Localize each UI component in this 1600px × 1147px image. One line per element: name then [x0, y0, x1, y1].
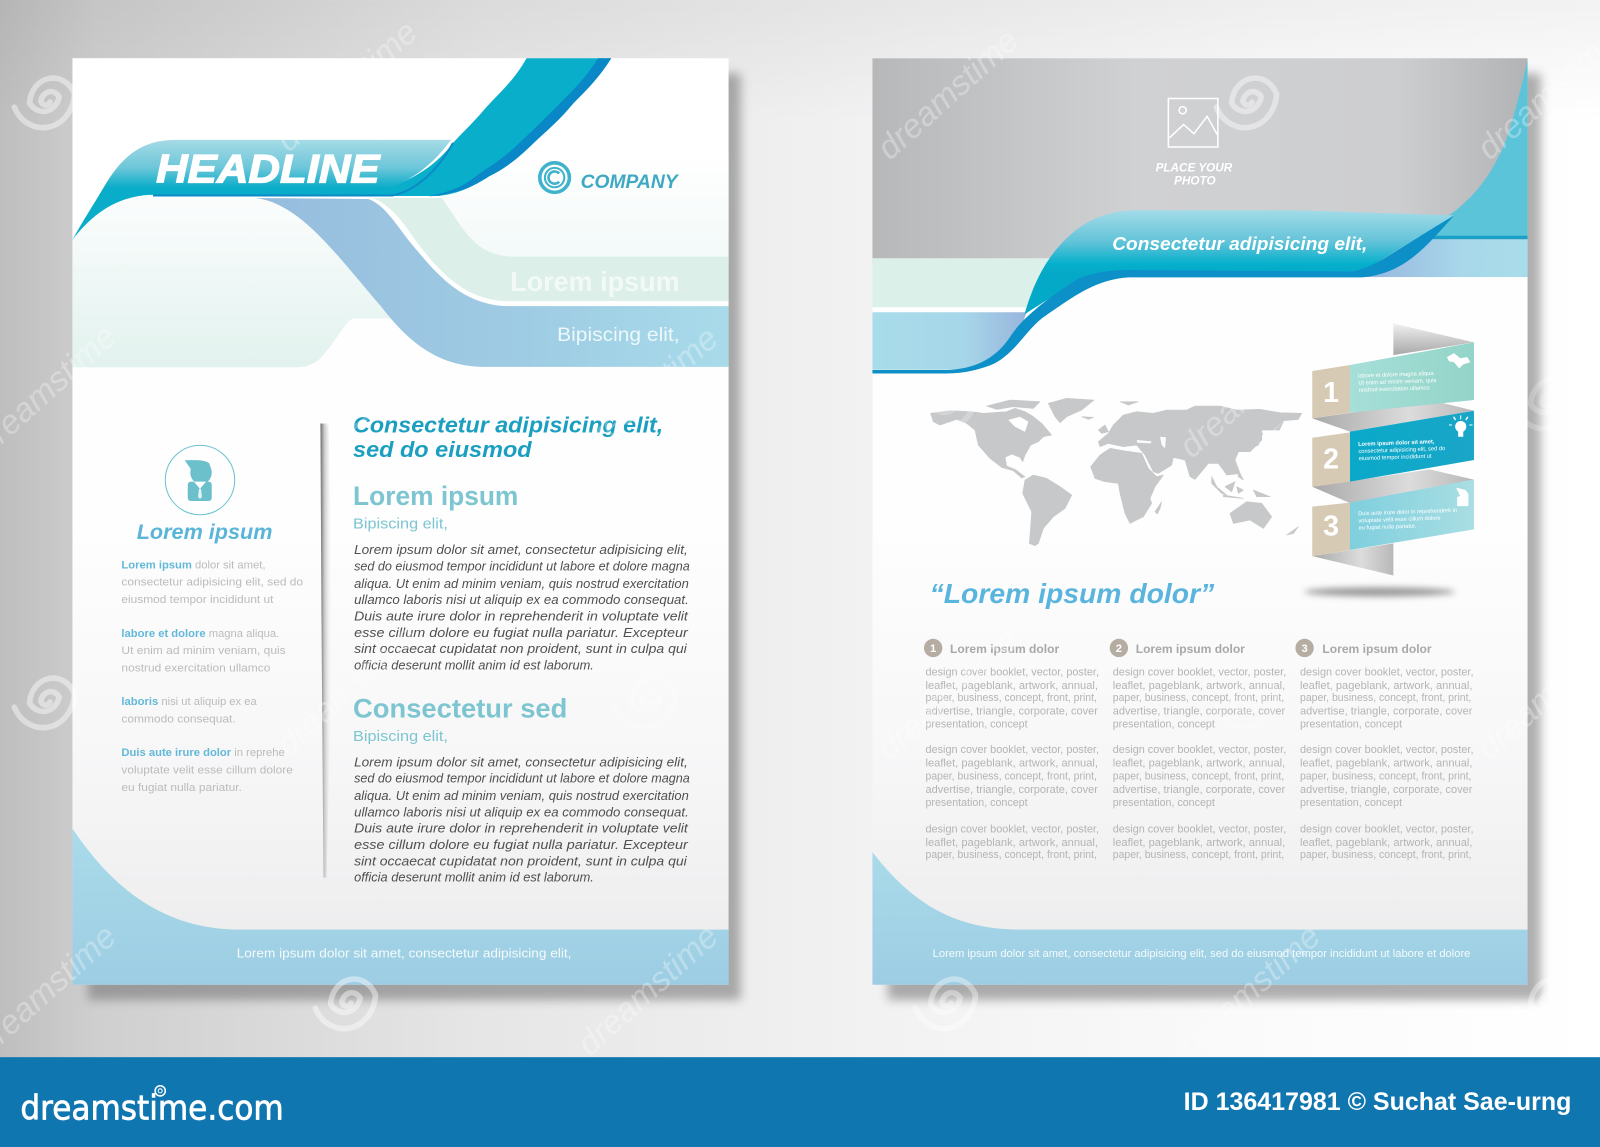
step 2: eiusmod tempor incididunt ut: [1359, 454, 1432, 462]
column 1: paper, business, concept, front, print,: [926, 692, 1097, 704]
sidebar text: [121, 559, 303, 794]
column 3: presentation, concept: [1300, 719, 1403, 731]
column 1: advertise, triangle, corporate, cover: [926, 705, 1098, 717]
step 1: labore et dolore magna aliqua.: [1358, 371, 1436, 380]
blue wave band: [256, 198, 729, 367]
step 2: [1312, 411, 1474, 487]
image id and credit: ID 136417981 © Suchat Sae-urng: [1184, 1088, 1571, 1116]
column 2: [1110, 639, 1286, 861]
dreamstime logo: dreamstime.com: [20, 1088, 284, 1127]
sidebar text: eu fugiat nulla pariatur.: [121, 782, 242, 794]
paragraph 1: [354, 542, 690, 672]
icon: person: [1456, 488, 1468, 506]
column 3: [1295, 639, 1473, 861]
watermark text: dreamstime: [1172, 320, 1328, 465]
shadow ellipse: [1304, 587, 1455, 596]
step 3: [1312, 479, 1474, 556]
paragraph 2: esse cillum dolore eu fugiat nulla pariatur. Excepteur: [354, 837, 689, 852]
ribbon infographic: [1304, 324, 1474, 596]
column 2: design cover booklet, vector, poster,: [1113, 824, 1286, 836]
watermark text: dreamstime: [870, 22, 1026, 167]
sidebar text: Duis aute irure dolor in reprehe: [121, 747, 285, 759]
step 2: consectetur adipisicing elit, sed do: [1358, 446, 1445, 455]
paragraph 1: Duis aute irure dolor in reprehenderit in voluptate velit: [354, 608, 688, 623]
sidebar text: voluptate velit esse cillum dolore: [121, 764, 293, 776]
panel: right brochure page: [872, 58, 1528, 985]
step 3: eu fugiat nulla pariatur.: [1359, 524, 1417, 532]
photo caption: PHOTO: [1174, 175, 1216, 188]
column 1: Lorem ipsum dolor: [950, 643, 1060, 656]
watermark text: dreamstime: [269, 618, 425, 763]
sidebar text: nostrud exercitation ullamco: [121, 662, 270, 674]
paragraph 1: sint occaecat cupidatat non proident, sunt in culpa qui: [354, 641, 688, 656]
subheading 1: Bipiscing elit,: [353, 517, 448, 533]
column 3: 3: [1301, 643, 1308, 655]
step 1: Ut enim ad minim veniam, quis: [1358, 378, 1437, 387]
step 1 fold: [1312, 401, 1474, 432]
icon: company logo: [540, 163, 569, 192]
step 2: 2: [1323, 443, 1339, 475]
right footer text: Lorem ipsum dolor sit amet, consectetur adipisicing elit, sed do eiusmod tempor incididunt ut labore et dolore: [933, 948, 1470, 960]
right footer band: [872, 852, 1528, 985]
column 3: paper, business, concept, front, print,: [1300, 771, 1471, 783]
left light blue band: [872, 312, 1027, 369]
column 2: paper, business, concept, front, print,: [1113, 849, 1284, 861]
subheading 2: Bipiscing elit,: [353, 729, 448, 745]
main heading: Consectetur adipisicing elit,: [353, 413, 663, 438]
column 3: advertise, triangle, corporate, cover: [1300, 705, 1473, 717]
icon: light bulb: [1449, 415, 1472, 437]
paragraph 2: officia deserunt mollit anim id est laborum.: [354, 870, 594, 885]
main heading: sed do eiusmod: [353, 437, 533, 462]
paragraph 2: sed do eiusmod tempor incididunt ut labore et dolore magna: [354, 771, 690, 786]
column 3: leaflet, pageblank, artwork, annual,: [1300, 680, 1472, 692]
step 3: 3: [1323, 511, 1339, 543]
column 1: design cover booklet, vector, poster,: [926, 667, 1099, 679]
column 3: paper, business, concept, front, print,: [1300, 692, 1471, 704]
icon: person in circle: [165, 445, 235, 515]
headline ribbon: [72, 58, 611, 240]
wave ribbon: [872, 210, 1454, 374]
column 3: advertise, triangle, corporate, cover: [1300, 784, 1473, 796]
photo placeholder area: [872, 58, 1528, 263]
top gray fold: [1393, 324, 1474, 355]
faint wash top right: [439, 153, 729, 265]
photo caption: PLACE YOUR: [1156, 161, 1233, 174]
panel: left brochure page: [72, 58, 729, 985]
sidebar heading: Lorem ipsum: [137, 520, 272, 544]
paragraph 1: sed do eiusmod tempor incididunt ut labore et dolore magna: [354, 558, 690, 573]
column 1: design cover booklet, vector, poster,: [926, 744, 1099, 756]
world map: [931, 398, 1302, 546]
section heading: Lorem ipsum: Lorem ipsum: [353, 481, 518, 511]
paragraph 2: [354, 754, 690, 885]
column 2: presentation, concept: [1113, 719, 1216, 731]
sidebar text: Ut enim ad minim veniam, quis: [121, 645, 286, 657]
paragraph 2: Lorem ipsum dolor sit amet, consectetur adipisicing elit,: [354, 754, 688, 769]
paragraph 1: officia deserunt mollit anim id est laborum.: [354, 657, 594, 672]
column 1: 1: [930, 643, 936, 655]
teal corner: [1418, 60, 1528, 237]
column 1: leaflet, pageblank, artwork, annual,: [926, 837, 1098, 849]
column 2: advertise, triangle, corporate, cover: [1113, 705, 1285, 717]
left footer text: Lorem ipsum dolor sit amet, consectetur adipisicing elit,: [237, 946, 571, 961]
step 1: nostrud exercitation ullamco: [1359, 385, 1430, 394]
column 3: leaflet, pageblank, artwork, annual,: [1300, 757, 1472, 769]
column 2: design cover booklet, vector, poster,: [1113, 667, 1286, 679]
column 3: presentation, concept: [1300, 797, 1403, 809]
column 2: 2: [1116, 643, 1122, 655]
column 3: design cover booklet, vector, poster,: [1300, 824, 1473, 836]
mint wave band: [373, 198, 729, 301]
paragraph 2: sint occaecat cupidatat non proident, sunt in culpa qui: [354, 853, 688, 868]
column 2: presentation, concept: [1113, 797, 1216, 809]
left footer band: [72, 829, 729, 985]
mint panel left: [72, 196, 393, 367]
column 3: paper, business, concept, front, print,: [1300, 849, 1471, 861]
paragraph 1: esse cillum dolore eu fugiat nulla pariatur. Excepteur: [354, 625, 689, 640]
paragraph 2: aliqua. Ut enim ad minim veniam, quis nostrud exercitation: [354, 788, 689, 803]
column 2: paper, business, concept, front, print,: [1113, 771, 1284, 783]
column 1: [924, 639, 1099, 861]
paragraph 1: ullamco laboris nisi ut aliquip ex ea commodo consequat.: [354, 592, 689, 607]
column fold line: [320, 424, 333, 878]
right page shadow: [888, 74, 1541, 1000]
column 2: design cover booklet, vector, poster,: [1113, 744, 1286, 756]
step 1: [1312, 342, 1474, 418]
column 3: leaflet, pageblank, artwork, annual,: [1300, 837, 1472, 849]
company name: COMPANY: [581, 171, 680, 193]
sidebar text: consectetur adipisicing elit, sed do: [121, 577, 303, 589]
column 2: Lorem ipsum dolor: [1136, 643, 1245, 656]
step 3: Duis aute irure dolor in reprehenderit in: [1358, 508, 1457, 517]
column 1: advertise, triangle, corporate, cover: [926, 784, 1098, 796]
sidebar text: laboris nisi ut aliquip ex ea: [121, 696, 258, 708]
title: HEADLINE: HEADLINE: [156, 148, 381, 192]
paragraph 1: aliqua. Ut enim ad minim veniam, quis nostrud exercitation: [354, 576, 689, 591]
watermark text: dreamstime: [570, 918, 726, 1063]
column 3: Lorem ipsum dolor: [1322, 643, 1432, 656]
column 3: design cover booklet, vector, poster,: [1300, 667, 1473, 679]
column 1: design cover booklet, vector, poster,: [926, 824, 1099, 836]
band text: Bipiscing elit: Bipiscing elit,: [557, 324, 680, 346]
section heading: Consectetur sed: Consectetur sed: [353, 693, 567, 723]
step 1: 1: [1323, 377, 1339, 409]
column 1: presentation, concept: [926, 719, 1028, 731]
step 3: voluptate velit esse cillum dolore: [1358, 516, 1441, 524]
sidebar text: Lorem ipsum dolor sit amet,: [121, 559, 265, 571]
column 3: design cover booklet, vector, poster,: [1300, 744, 1473, 756]
column 1: leaflet, pageblank, artwork, annual,: [926, 757, 1098, 769]
watermark text: dreamstime: [870, 622, 1026, 767]
column 2: paper, business, concept, front, print,: [1113, 692, 1284, 704]
step 2 fold: [1312, 469, 1474, 503]
photo caption: [1156, 161, 1233, 188]
band text: Lorem ipsum: Lorem ipsum: [510, 266, 680, 297]
main heading: [353, 413, 663, 462]
mint strip: [872, 258, 1056, 307]
sidebar text: commodo consequat.: [121, 713, 236, 725]
column 2: leaflet, pageblank, artwork, annual,: [1113, 757, 1285, 769]
icon: image placeholder: [1168, 98, 1218, 147]
quote heading: “Lorem ipsum dolor”: [930, 578, 1215, 609]
sidebar text: labore et dolore magna aliqua.: [121, 628, 279, 640]
paragraph 1: Lorem ipsum dolor sit amet, consectetur adipisicing elit,: [354, 542, 688, 557]
column 2: leaflet, pageblank, artwork, annual,: [1113, 680, 1285, 692]
watermark text: dreamstime: [269, 14, 425, 159]
paragraph 2: ullamco laboris nisi ut aliquip ex ea commodo consequat.: [354, 804, 689, 819]
watermark text: dreamstime: [570, 320, 726, 465]
bottom gray fold: [1312, 543, 1393, 576]
paragraph 2: Duis aute irure dolor in reprehenderit in voluptate velit: [354, 821, 688, 836]
column 1: presentation, concept: [926, 797, 1028, 809]
column 1: paper, business, concept, front, print,: [926, 849, 1097, 861]
column 1: paper, business, concept, front, print,: [926, 771, 1097, 783]
teal corner line: [1423, 236, 1528, 239]
column 2: advertise, triangle, corporate, cover: [1113, 784, 1285, 796]
column 1: leaflet, pageblank, artwork, annual,: [926, 680, 1098, 692]
step 2: Lorem ipsum dolor sit amet,: [1358, 439, 1435, 448]
sidebar text: eiusmod tempor incididunt ut: [121, 594, 274, 606]
left page shadow: [88, 74, 741, 1000]
right light blue band: [1367, 239, 1528, 277]
watermark text: dreamstime: [1172, 918, 1328, 1063]
ribbon caption: Consectetur adipisicing elit,: [1112, 233, 1367, 254]
column 2: leaflet, pageblank, artwork, annual,: [1113, 837, 1285, 849]
footer bar: [0, 1057, 1600, 1147]
icon: handshake: [1447, 353, 1470, 368]
